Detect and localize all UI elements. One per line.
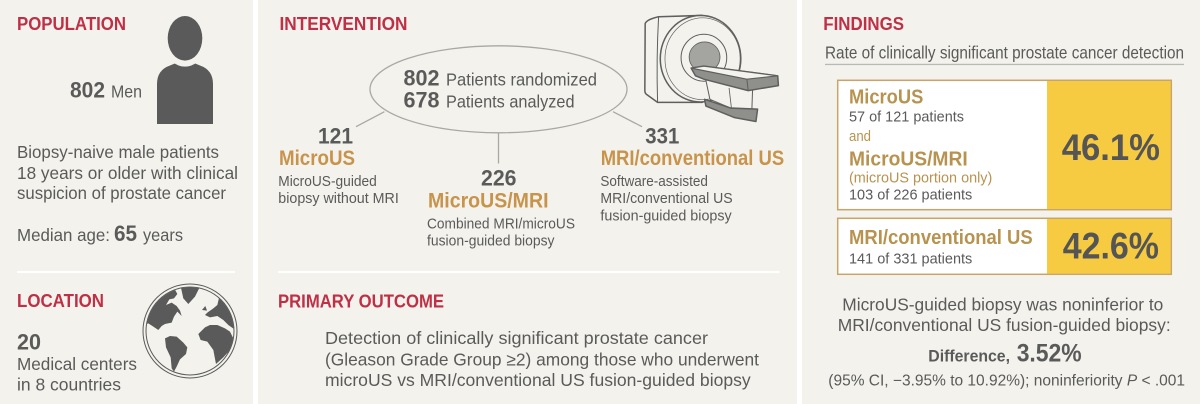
- stat: median age: Median age:: [17, 225, 110, 245]
- arm: MRI/conventional US: Software-assisted: [600, 174, 708, 190]
- result box: MicroUS and MicroUS/MRI 46.1%: 103 of 226 patients: [849, 186, 972, 203]
- arm: MicroUS: MicroUS: [279, 147, 355, 170]
- connector: center arm: [498, 133, 500, 164]
- result box: MicroUS and MicroUS/MRI 46.1%: [838, 80, 1171, 210]
- result box: MicroUS and MicroUS/MRI 46.1%: MicroUS: [849, 86, 923, 108]
- arm: MicroUS/MRI: MicroUS/MRI: [428, 190, 548, 213]
- heading: location: LOCATION: [17, 290, 104, 311]
- text: noninferiority conclusion: [838, 295, 1171, 335]
- stat: median age: years: [143, 225, 183, 245]
- stat: 802 men: 802: [70, 78, 105, 102]
- arm: MicroUS: MicroUS-guided: [278, 174, 377, 190]
- stat: 20 medical centers: in 8 countries: [17, 374, 121, 394]
- diagram: randomization ellipse: 802: [404, 65, 440, 90]
- arm: MRI/conventional US: MRI/conventional US: [600, 191, 733, 207]
- arm: MicroUS: [278, 123, 399, 207]
- arm: MicroUS/MRI: [427, 165, 575, 250]
- text: patient description: suspicion of prostate cancer: [17, 183, 226, 203]
- result box: MicroUS and MicroUS/MRI 46.1%: and: [849, 128, 871, 145]
- text: primary outcome description: [325, 328, 759, 390]
- panel: population and location: [0, 0, 253, 404]
- text: noninferiority conclusion: MicroUS-guided biopsy was noninferior to: [842, 295, 1163, 315]
- stat: 802 men: Men: [111, 82, 142, 102]
- text: primary outcome description: microUS vs MRI/conventional US fusion-guided biopsy: [325, 370, 751, 390]
- arm: MRI/conventional US: MRI/conventional US: [601, 147, 784, 170]
- stat: 20 medical centers: [17, 330, 137, 394]
- stat: 20 medical centers: 20: [17, 330, 41, 354]
- heading: population: POPULATION: [17, 13, 126, 34]
- result box: MRI/conventional US 42.6%: [838, 218, 1171, 274]
- result box: MicroUS and MicroUS/MRI 46.1%: 46.1%: [1062, 127, 1160, 168]
- icon: globe: [140, 283, 243, 378]
- text: confidence interval: (95% CI, −3.95% to 10.92%); noninferiority P < .001: [828, 372, 1185, 389]
- result box: MRI/conventional US 42.6%: 42.6%: [1063, 225, 1159, 266]
- stat: difference: Difference,: [928, 348, 1010, 366]
- result box: MRI/conventional US 42.6%: MRI/conventional US: [849, 227, 1033, 249]
- connector: right arm: [613, 112, 642, 127]
- heading: primary outcome: PRIMARY OUTCOME: [278, 290, 444, 312]
- arm: MicroUS: 121: [318, 123, 353, 148]
- text: primary outcome description: (Gleason Grade Group ≥2) among those who underwent: [325, 349, 759, 369]
- arm: MRI/conventional US: 331: [645, 123, 679, 148]
- arm: MicroUS/MRI: Combined MRI/microUS: [427, 216, 575, 232]
- result box: MicroUS and MicroUS/MRI 46.1%: 57 of 121 patients: [849, 109, 964, 126]
- arm: MicroUS/MRI: 226: [481, 165, 516, 190]
- text: primary outcome description: Detection of clinically significant prostate cancer: [325, 328, 708, 348]
- text: patient description: Biopsy-naive male patients: [17, 142, 219, 162]
- heading: findings: FINDINGS: [823, 13, 904, 34]
- diagram: randomization ellipse: 678: [404, 88, 440, 113]
- diagram: randomization ellipse: Patients analyzed: [446, 92, 574, 112]
- text: patient description: 18 years or older with clinical: [17, 163, 238, 183]
- diagram: randomization ellipse: [370, 46, 627, 133]
- result box: MRI/conventional US 42.6%: 141 of 331 patients: [849, 250, 972, 267]
- diagram: randomization ellipse: Patients randomized: [446, 69, 597, 89]
- heading: intervention: INTERVENTION: [280, 13, 408, 34]
- stat: difference: 3.52%: [1017, 340, 1082, 368]
- icon: person: [157, 16, 213, 124]
- stat: difference: [928, 340, 1082, 368]
- icon: MRI scanner: [645, 15, 778, 121]
- text: patient description: [17, 142, 238, 203]
- panel: intervention and primary outcome: [258, 0, 797, 404]
- arm: MicroUS/MRI: fusion-guided biopsy: [427, 234, 555, 250]
- stat: 20 medical centers: Medical centers: [17, 354, 137, 374]
- text: noninferiority conclusion: MRI/conventional US fusion-guided biopsy:: [838, 315, 1171, 335]
- result box: MicroUS and MicroUS/MRI 46.1%: MicroUS/MRI: [849, 149, 968, 171]
- connector: left arm: [356, 112, 384, 127]
- result box: MicroUS and MicroUS/MRI 46.1%: (microUS portion only): [849, 170, 992, 187]
- panel: findings: [802, 0, 1200, 404]
- arm: MRI/conventional US: [600, 123, 784, 225]
- arm: MRI/conventional US: fusion-guided biopsy: [600, 209, 732, 225]
- stat: median age: 65: [114, 221, 137, 246]
- stat: median age: [17, 221, 183, 246]
- arm: MicroUS: biopsy without MRI: [278, 191, 399, 207]
- stat: 802 men: [70, 78, 142, 102]
